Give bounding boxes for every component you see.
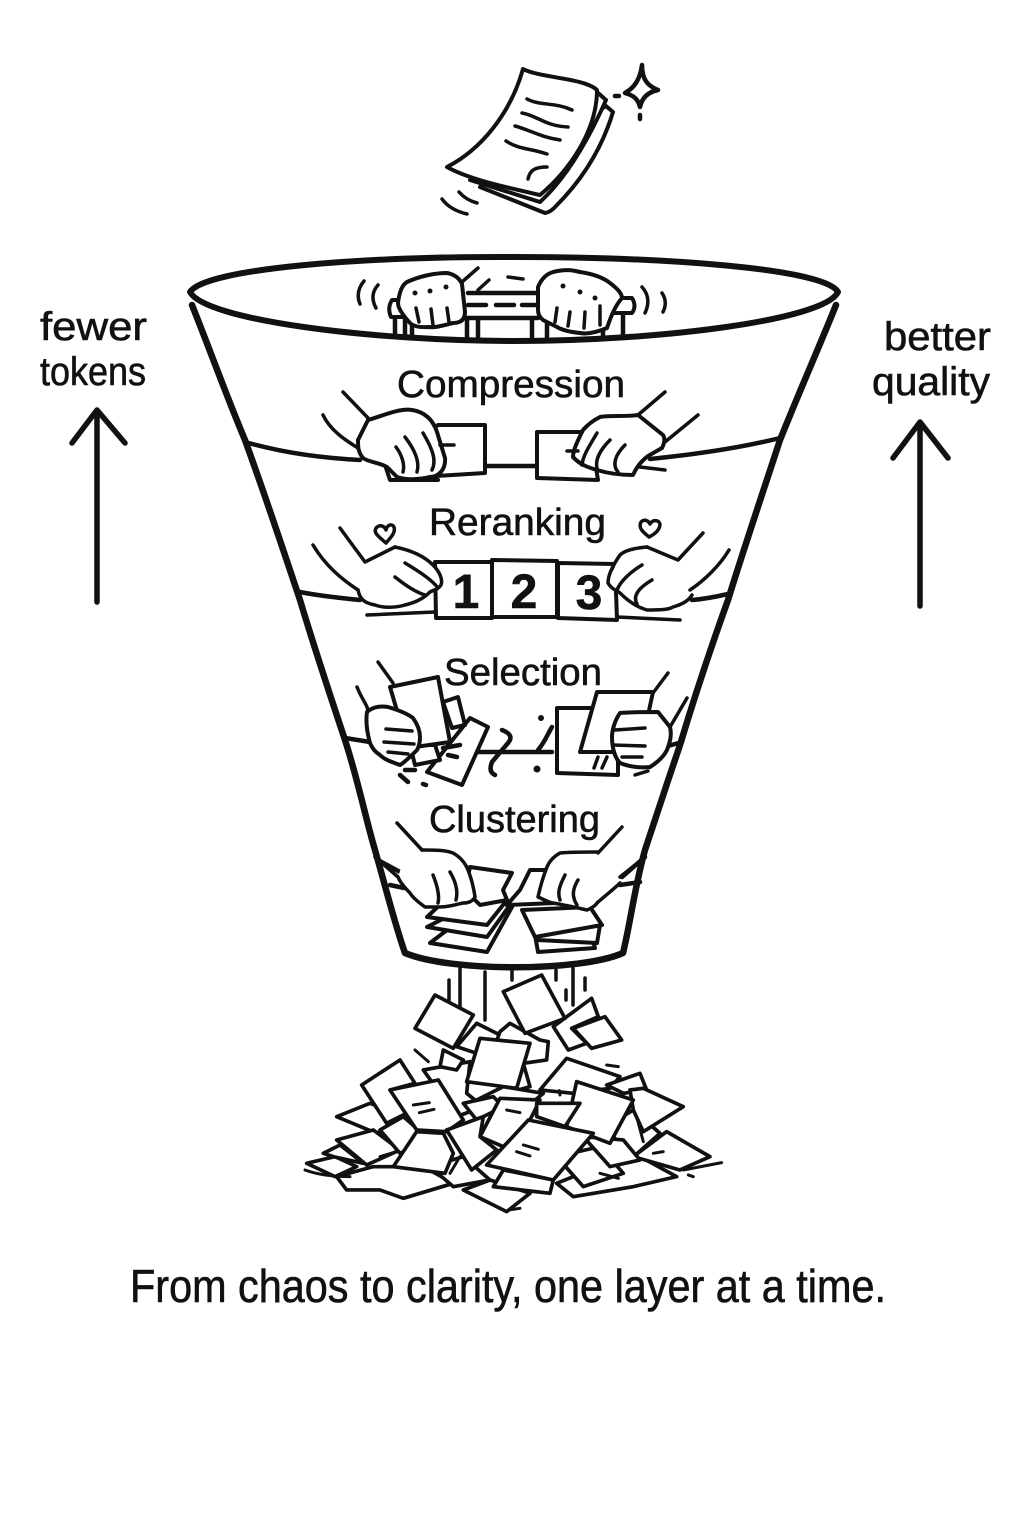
label: Compression: Compression <box>397 364 625 406</box>
compression hands and cards <box>323 392 698 480</box>
hands gripping press handle <box>358 268 665 337</box>
paper pile <box>305 975 722 1212</box>
label: better quality: better <box>884 315 991 359</box>
tile 3 <box>558 563 617 620</box>
label: fewer tokens: fewer <box>40 305 147 349</box>
tile 3: 3 <box>576 567 602 620</box>
label: fewer tokens <box>40 305 147 394</box>
layer divider lines <box>245 438 780 888</box>
selection hands holding cards, with discarded cards <box>357 662 687 785</box>
label: Reranking: Reranking <box>429 502 606 544</box>
tile 1: 1 <box>453 566 479 619</box>
icon: falling document with sparkle <box>442 65 658 214</box>
tile 2: 2 <box>511 566 537 619</box>
label: better quality <box>872 315 991 404</box>
label: fewer tokens: tokens <box>40 350 146 394</box>
label: Selection: Selection <box>444 652 602 694</box>
caption: From chaos to clarity, one layer at a time. <box>130 1260 886 1312</box>
label: better quality: quality <box>872 360 990 404</box>
speed lines under funnel <box>449 968 585 1020</box>
funnel body outline <box>190 257 838 967</box>
reranking hands and numbered tiles <box>313 520 729 620</box>
tile 1 <box>435 562 492 619</box>
label: Clustering: Clustering <box>429 799 600 841</box>
arrow: better quality up <box>893 422 948 606</box>
arrow: fewer tokens up <box>72 410 125 602</box>
clustering hands sorting paper stacks <box>375 823 645 952</box>
tile 2 <box>492 560 557 619</box>
